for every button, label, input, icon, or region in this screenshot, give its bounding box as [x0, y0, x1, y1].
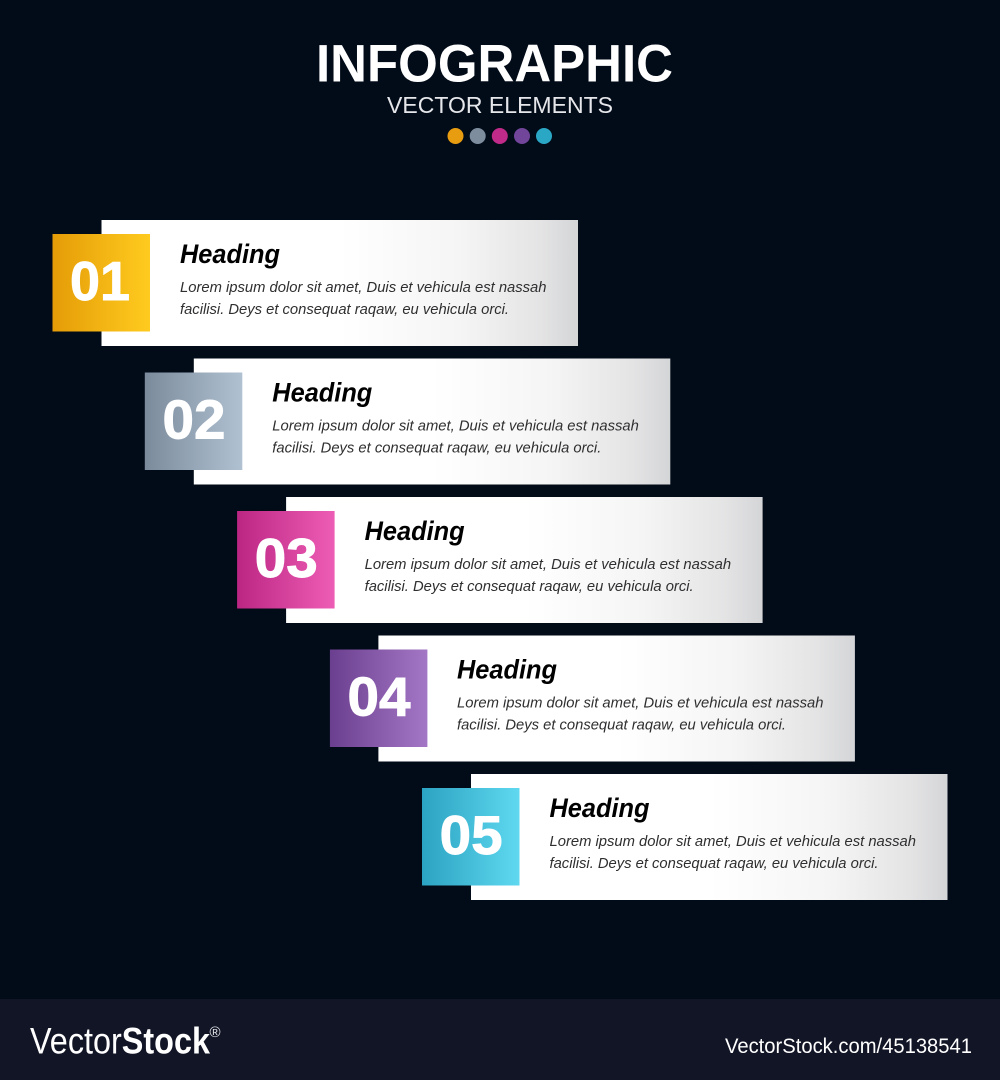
- panel: step 03: 03: [255, 527, 318, 589]
- panel: step 02: facilisi. Deys et consequat raqaw, eu vehicula orci.: [272, 440, 601, 456]
- title: INFOGRAPHIC: [316, 34, 673, 94]
- panel: step 03: Heading: [365, 516, 465, 546]
- footer bar: [0, 999, 1000, 1080]
- panel: step 05: Lorem ipsum dolor sit amet, Duis et vehicula est nassah: [550, 834, 916, 850]
- panel: step 01: 01: [70, 250, 130, 312]
- registered mark: ®: [210, 1024, 221, 1041]
- subtitle: VECTOR ELEMENTS: [387, 92, 613, 118]
- panel: step 04: Lorem ipsum dolor sit amet, Duis et vehicula est nassah: [457, 696, 824, 712]
- panel: step 05: facilisi. Deys et consequat raqaw, eu vehicula orci.: [550, 856, 878, 872]
- panel: step 04: facilisi. Deys et consequat raqaw, eu vehicula orci.: [457, 718, 786, 734]
- panel: step 04: 04: [348, 666, 411, 728]
- panel: step 01: Heading: [180, 239, 280, 269]
- panel: step 05: 05: [440, 804, 503, 866]
- panel: step 05: [422, 774, 948, 900]
- footer image id: VectorStock.com/45138541: [725, 1035, 972, 1058]
- panel: step 01: facilisi. Deys et consequat raqaw, eu vehicula orci.: [180, 302, 509, 318]
- footer logo: VectorStock: [30, 1020, 210, 1062]
- panel: step 04: [330, 636, 855, 762]
- panel: step 03: [237, 497, 763, 623]
- panel: step 03: facilisi. Deys et consequat raqaw, eu vehicula orci.: [365, 579, 694, 595]
- panel: step 04: Heading: [457, 654, 557, 684]
- panel: step 03: Lorem ipsum dolor sit amet, Duis et vehicula est nassah: [365, 557, 731, 573]
- panel: step 02: Heading: [272, 378, 372, 408]
- panel: step 02: 02: [162, 388, 226, 450]
- panel: step 01: Lorem ipsum dolor sit amet, Duis et vehicula est nassah: [180, 280, 546, 296]
- panel: step 02: Lorem ipsum dolor sit amet, Duis et vehicula est nassah: [272, 418, 639, 434]
- colour dots: [448, 128, 552, 144]
- panel: step 05: Heading: [550, 793, 650, 823]
- panel: step 01: [52, 220, 578, 346]
- panel: step 02: [145, 358, 670, 484]
